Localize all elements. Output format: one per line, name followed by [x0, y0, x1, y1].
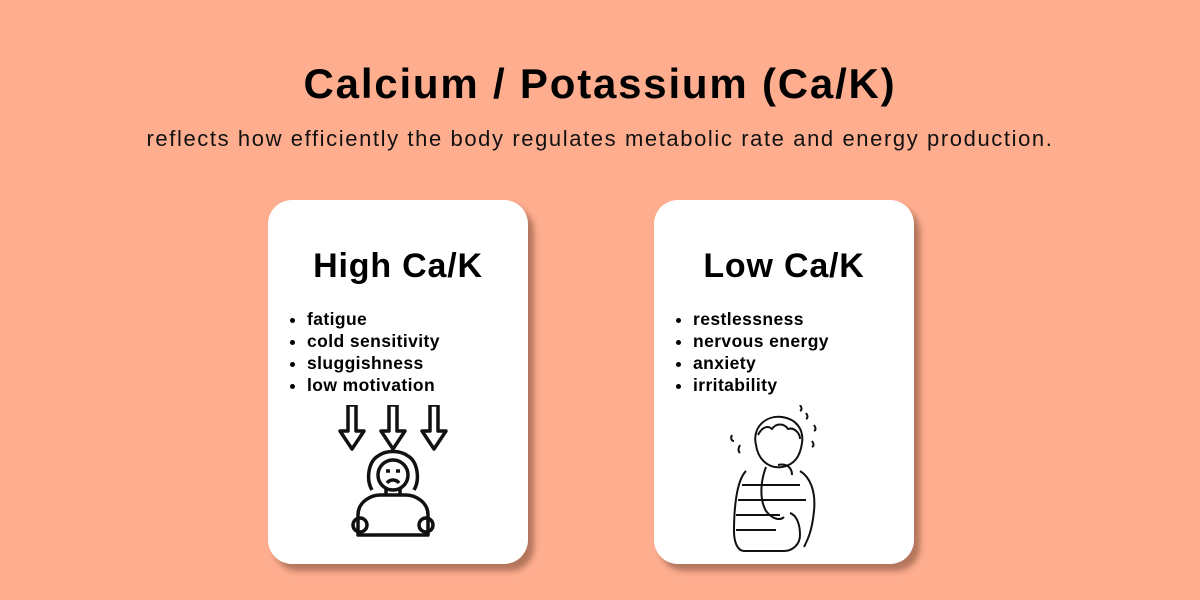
list: high symptoms: fatigue — [307, 309, 367, 329]
heading: low: Low Ca/K — [703, 247, 865, 285]
list: high symptoms — [290, 309, 440, 395]
list: high symptoms: cold sensitivity — [307, 331, 440, 351]
list: high symptoms: sluggishness — [307, 353, 424, 373]
list: low symptoms: restlessness — [693, 309, 804, 329]
list: low symptoms: nervous energy — [693, 331, 829, 351]
list: low symptoms: anxiety — [693, 353, 756, 373]
panel: high Ca/K — [268, 200, 528, 564]
icon: anxious person — [730, 405, 816, 552]
subtitle: reflects how efficiently the body regulates metabolic rate and energy production. — [146, 126, 1053, 151]
heading: high: High Ca/K — [313, 247, 483, 285]
panel: low Ca/K — [654, 200, 914, 564]
list: low symptoms: irritability — [693, 375, 778, 395]
list: high symptoms: low motivation — [307, 375, 435, 395]
title: Calcium / Potassium (Ca/K) — [304, 60, 896, 107]
list: low symptoms — [676, 309, 829, 395]
icon: down arrows and sad person — [338, 405, 448, 537]
